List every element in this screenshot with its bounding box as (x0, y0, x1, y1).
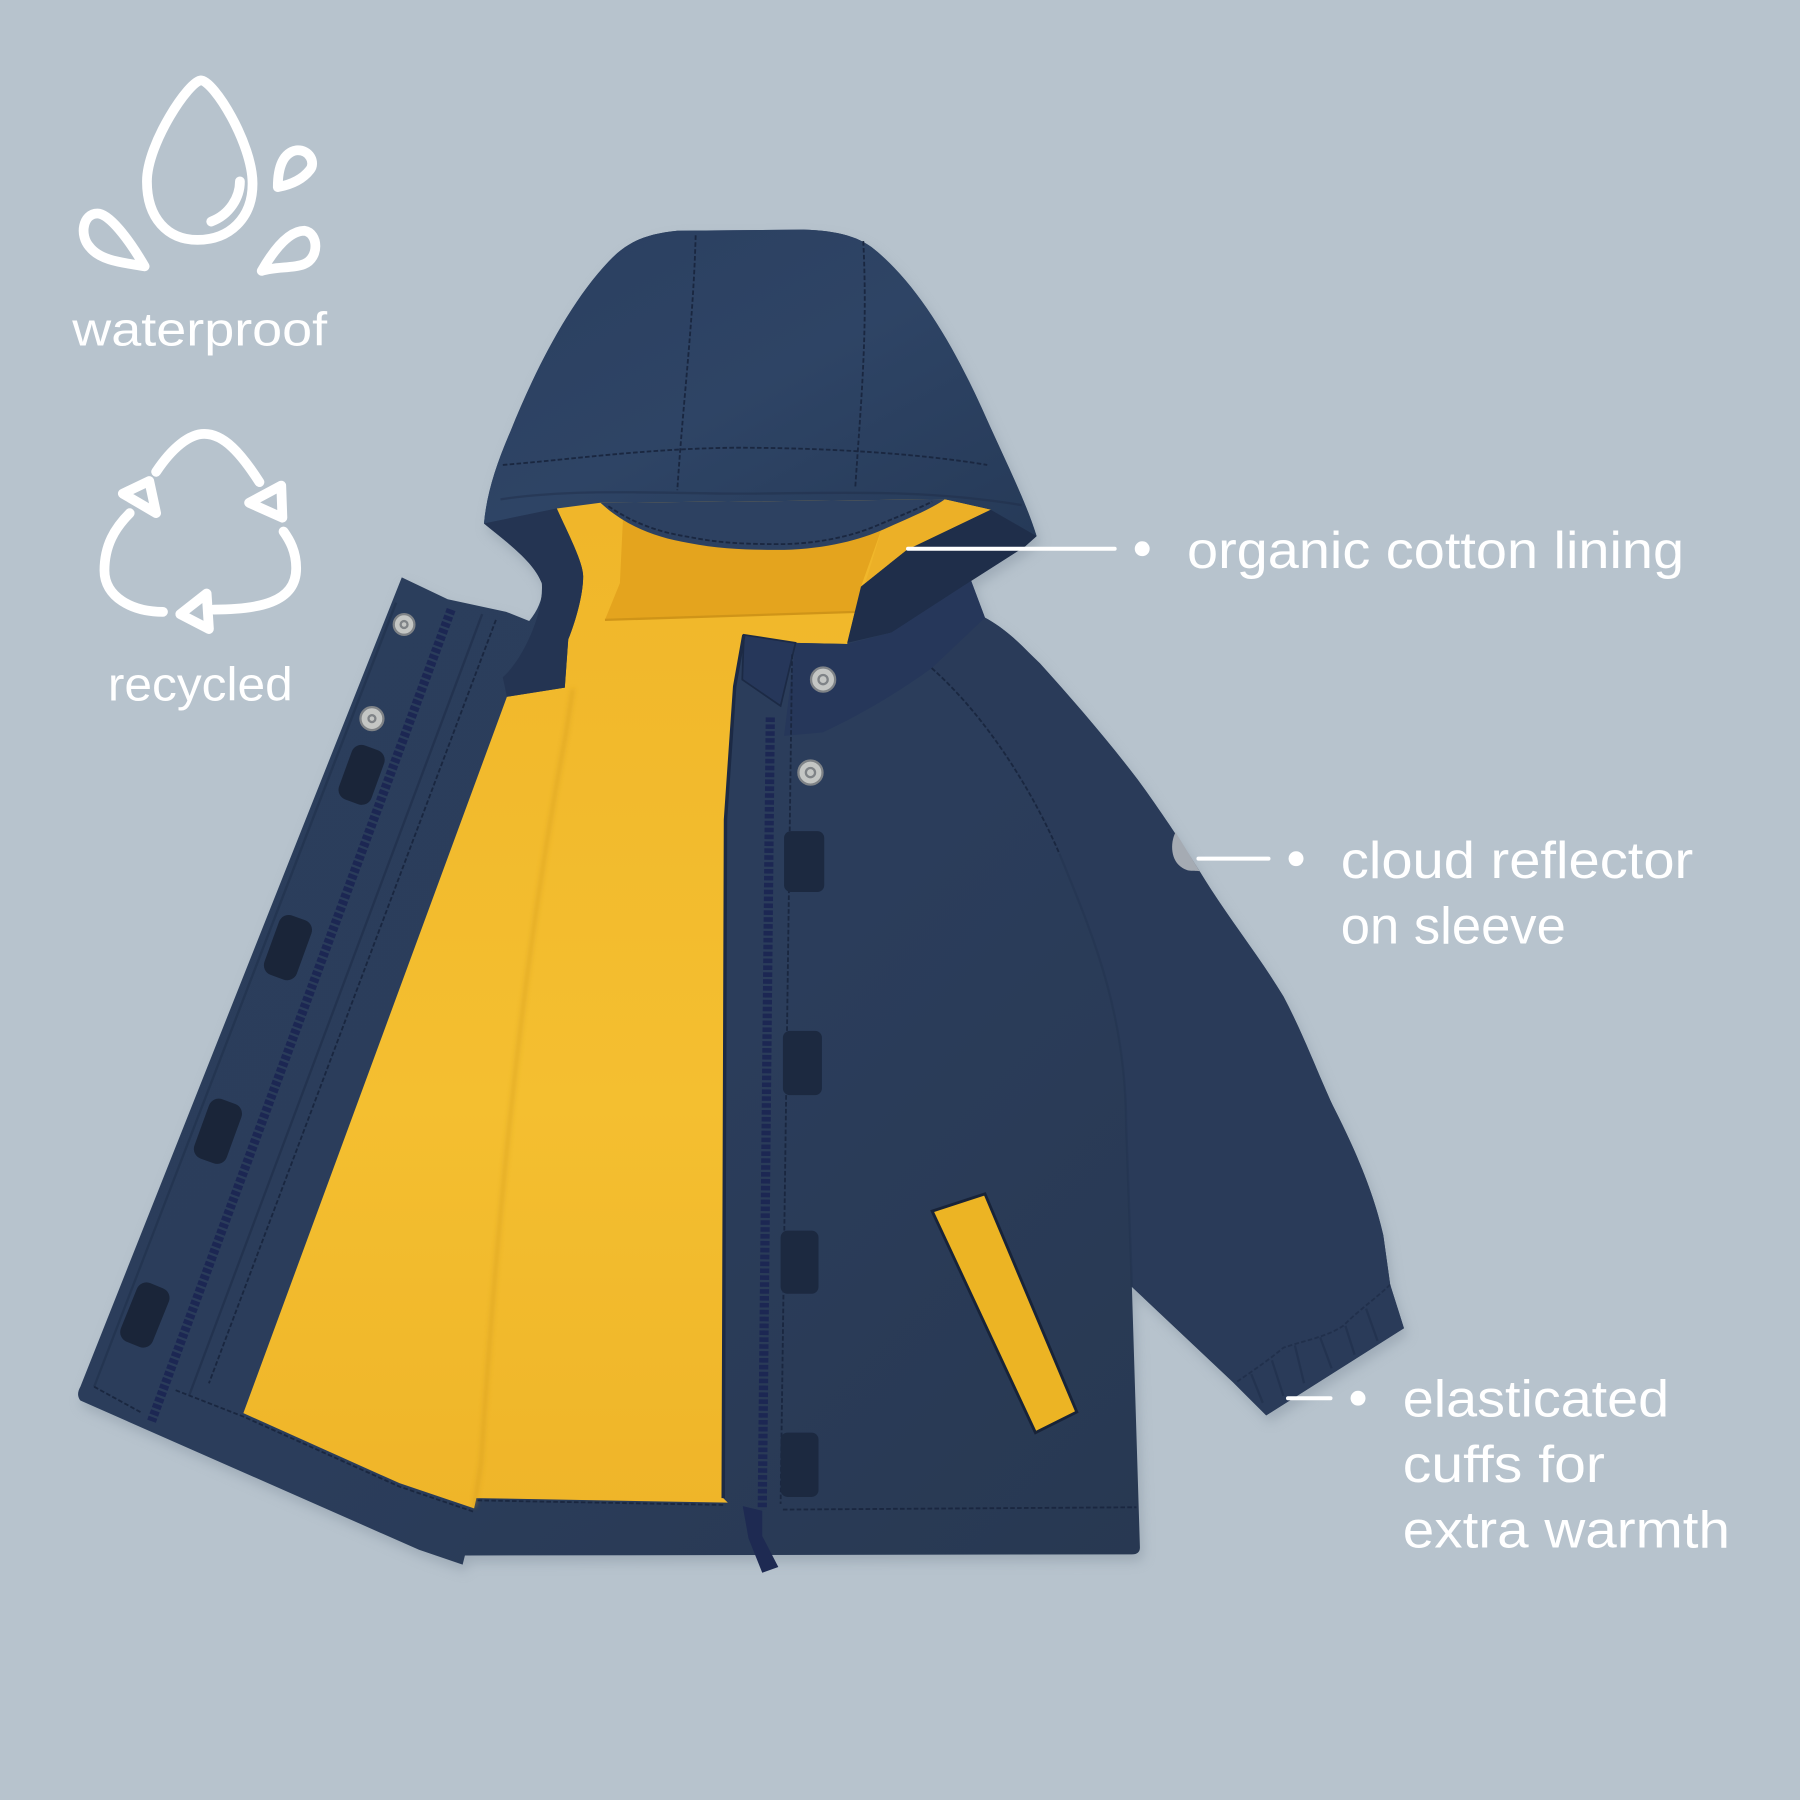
leader line (908, 547, 1115, 550)
leader line (1198, 857, 1268, 860)
icon: bottom arrowhead (180, 593, 209, 629)
visor stitch (608, 502, 932, 544)
jacket shadow (82, 236, 1407, 1572)
callout: organic cotton lining (908, 521, 1684, 579)
velcro tabs right (781, 831, 824, 1497)
callout: cloud reflector (1198, 831, 1693, 955)
icon: main water drop (147, 80, 253, 240)
icon: left arc (104, 513, 163, 612)
hood outer shell (484, 230, 1037, 536)
hood seams (501, 235, 1022, 505)
icon: small drop bottom right (262, 231, 315, 271)
hood visor (600, 499, 945, 550)
left zipper (152, 610, 451, 1421)
icon: left arrowhead (123, 481, 156, 513)
body side seam (1060, 854, 1132, 1287)
callout text line 3: extra warmth (1403, 1500, 1730, 1558)
cloud reflector (1172, 832, 1200, 871)
lining: neck seam (605, 612, 856, 620)
zipper pull (743, 1506, 778, 1573)
leader dot (1135, 541, 1150, 556)
hood inner right lining (847, 510, 1037, 643)
icon: right arrowhead (249, 486, 282, 518)
cuff gathers (1236, 1285, 1390, 1403)
icon: recycled arrows (104, 434, 296, 629)
sleeve seam (932, 668, 1060, 854)
lining: hood back panel (605, 505, 884, 620)
callout text: organic cotton lining (1187, 521, 1684, 579)
right placket edge (723, 635, 744, 1498)
hem stitches (478, 1500, 1136, 1510)
icon: small drop left (84, 214, 145, 266)
label: waterproof: waterproof (71, 303, 328, 356)
hood inner left lining (484, 509, 583, 697)
leader line (1288, 1396, 1330, 1400)
lining: yellow interior (243, 499, 991, 1508)
jacket silhouette (78, 230, 1404, 1565)
icon: bottom arc (214, 532, 296, 610)
left flap seams and placket (94, 603, 496, 1512)
callout: elasticated cuffs (1288, 1370, 1730, 1558)
callout text line 2: on sleeve (1341, 897, 1566, 955)
sleeve shade (932, 618, 1404, 1415)
right zipper (762, 717, 770, 1510)
right placket flap (742, 635, 796, 706)
leader dot (1289, 851, 1304, 866)
leader dot (1351, 1391, 1365, 1406)
collar (784, 581, 985, 736)
icon: waterproof drops (84, 80, 315, 271)
icon: drop highlight (211, 181, 240, 222)
velcro tabs left (117, 742, 388, 1351)
jacket (78, 230, 1407, 1573)
callout text line 2: cuffs for (1403, 1435, 1605, 1493)
callout text line 1: elasticated (1403, 1370, 1669, 1428)
snap buttons (360, 614, 835, 785)
right placket stitch (781, 654, 792, 1504)
lining: panel fold (474, 689, 573, 1507)
pocket (932, 1194, 1077, 1433)
icon: top arc (156, 434, 259, 482)
callout text line 1: cloud reflector (1341, 831, 1693, 889)
lining: hood right strip (856, 499, 991, 612)
icon: small drop top right (278, 150, 312, 187)
label: recycled: recycled (108, 657, 293, 710)
